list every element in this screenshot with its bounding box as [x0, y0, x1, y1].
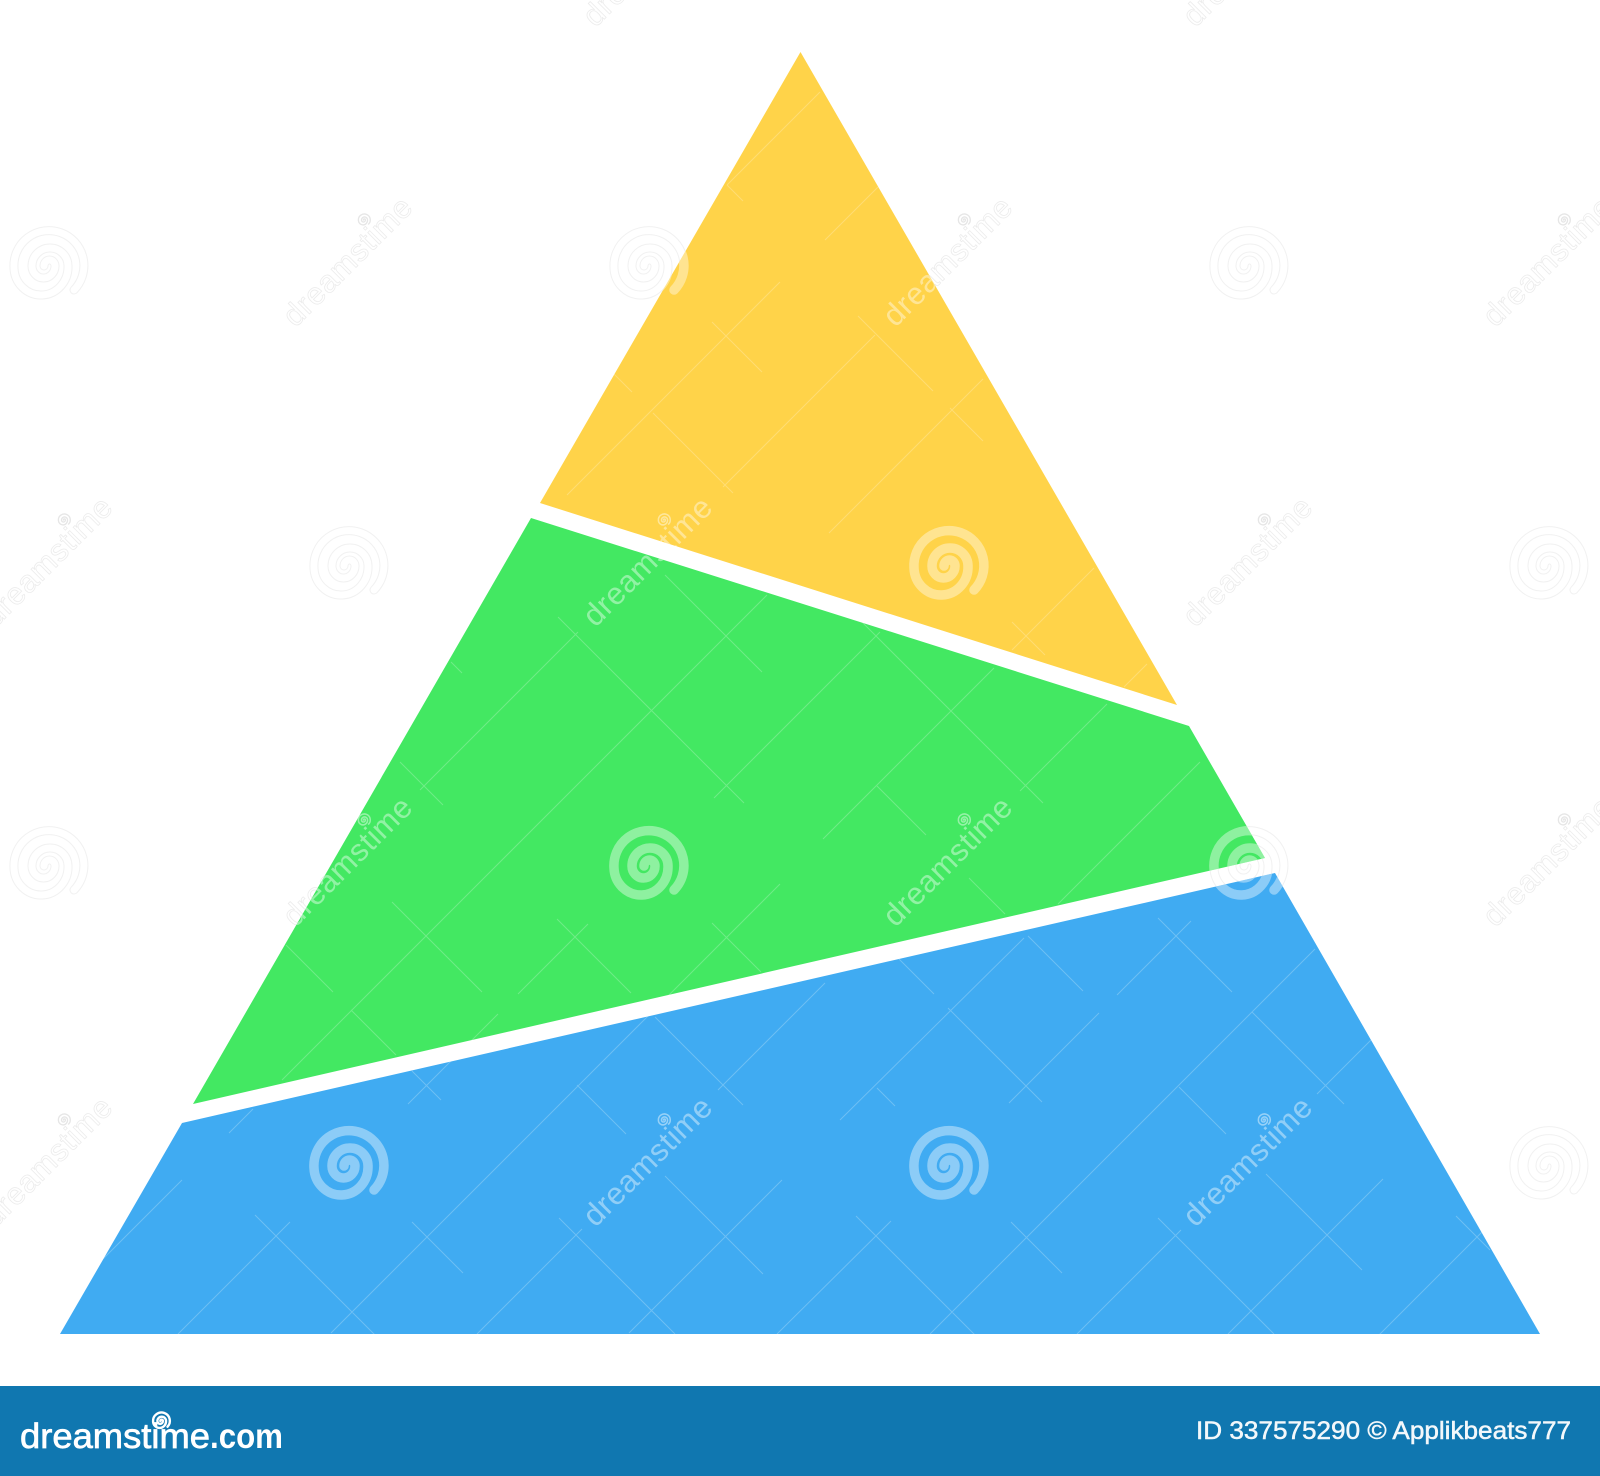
footer logo: .com [210, 1417, 283, 1456]
wordmarks on pyramid: dreamstime [576, 490, 719, 633]
wordmarks on white: dreamstime [876, 190, 1019, 333]
watermark hairlines [100, 92, 1490, 1335]
wordmarks on pyramid: dreamstime [876, 190, 1019, 333]
footer logo: dreamstime [20, 1417, 210, 1456]
footer bar [0, 1386, 1600, 1476]
wordmarks on pyramid: dreamstime [1176, 1090, 1319, 1233]
wordmarks on white: dreamstime [1176, 490, 1319, 633]
wordmarks on pyramid: dreamstime [576, 1090, 719, 1233]
pyramid top layer: yellow [540, 52, 1177, 705]
swirl marks on pyramid [314, 231, 1284, 1195]
watermark over pyramid [100, 92, 1490, 1335]
image id and credit: ID 337575290 © Applikbeats777 [1196, 1417, 1571, 1445]
footer logo [20, 1413, 283, 1456]
small swirls above wordmarks on pyramid [358, 514, 1270, 1125]
logo swirl [153, 1413, 170, 1428]
wordmarks on pyramid [296, 275, 1311, 1225]
swirl marks on white [14, 231, 1584, 1195]
wordmarks on pyramid: dreamstime [876, 790, 1019, 933]
small swirls above wordmarks on white [58, 214, 1570, 1125]
pyramid middle layer: green [193, 518, 1265, 1104]
wordmarks on pyramid: dreamstime [276, 790, 419, 933]
pyramid bottom layer: blue [60, 873, 1540, 1334]
wordmarks on white: dreamstime [276, 790, 419, 933]
wordmarks on white: dreamstime [276, 190, 419, 333]
